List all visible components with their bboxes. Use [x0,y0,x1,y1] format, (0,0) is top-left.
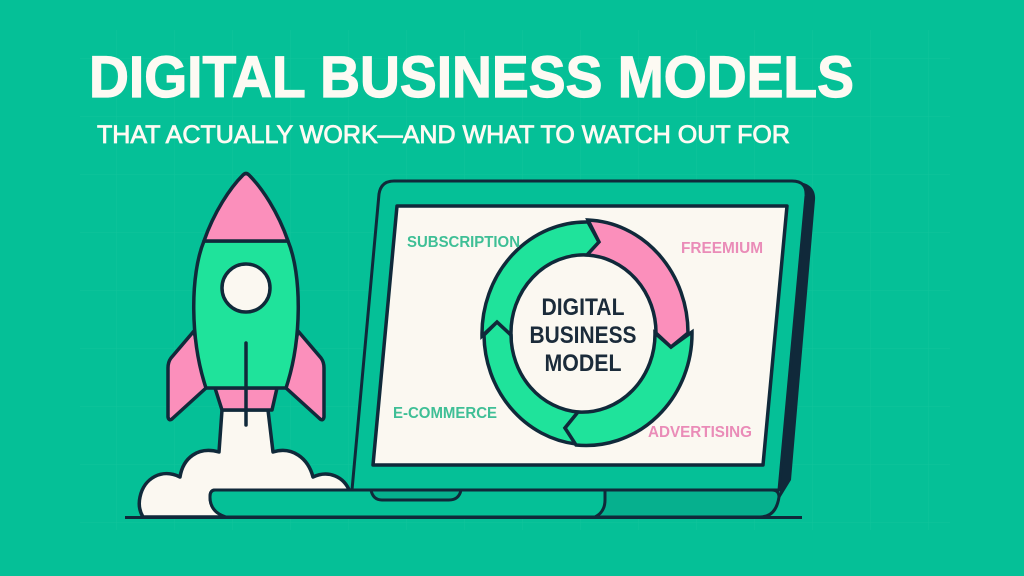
base left section [210,490,605,517]
nozzle [215,388,277,410]
laptop screen [373,206,787,465]
cycle centre label: BUSINESS [530,322,636,349]
subtitle: THAT ACTUALLY WORK—AND WHAT TO WATCH OUT FOR [97,121,790,149]
rocket window [222,264,270,312]
left fin [168,331,206,420]
ground line [125,516,802,519]
cycle centre label [530,294,636,377]
label: subscription: SUBSCRIPTION [407,234,520,251]
arrow: e-commerce [484,322,578,444]
trackpad notch [371,490,461,500]
laptop lid shadow [779,182,815,498]
rocket illustration [139,174,350,517]
rocket centre line [244,343,248,425]
arrow: subscription [482,222,599,336]
rocket body [194,241,298,388]
right fin [286,331,324,420]
base right section [595,490,779,517]
label: e-commerce: E-COMMERCE [393,405,497,422]
base outline [210,490,779,517]
label: freemium: FREEMIUM [681,240,763,257]
cycle centre label: DIGITAL [542,294,624,321]
smoke cloud [139,410,350,517]
laptop [125,181,815,518]
cycle centre label: MODEL [544,350,622,377]
cycle diagram [482,220,692,446]
rocket nose cone [204,174,288,241]
laptop base [210,490,779,517]
label: advertising: ADVERTISING [648,424,752,441]
arrow: freemium [587,220,688,347]
laptop lid [352,181,806,490]
title: DIGITAL BUSINESS MODELS [89,45,854,110]
arrow: advertising [565,332,692,446]
